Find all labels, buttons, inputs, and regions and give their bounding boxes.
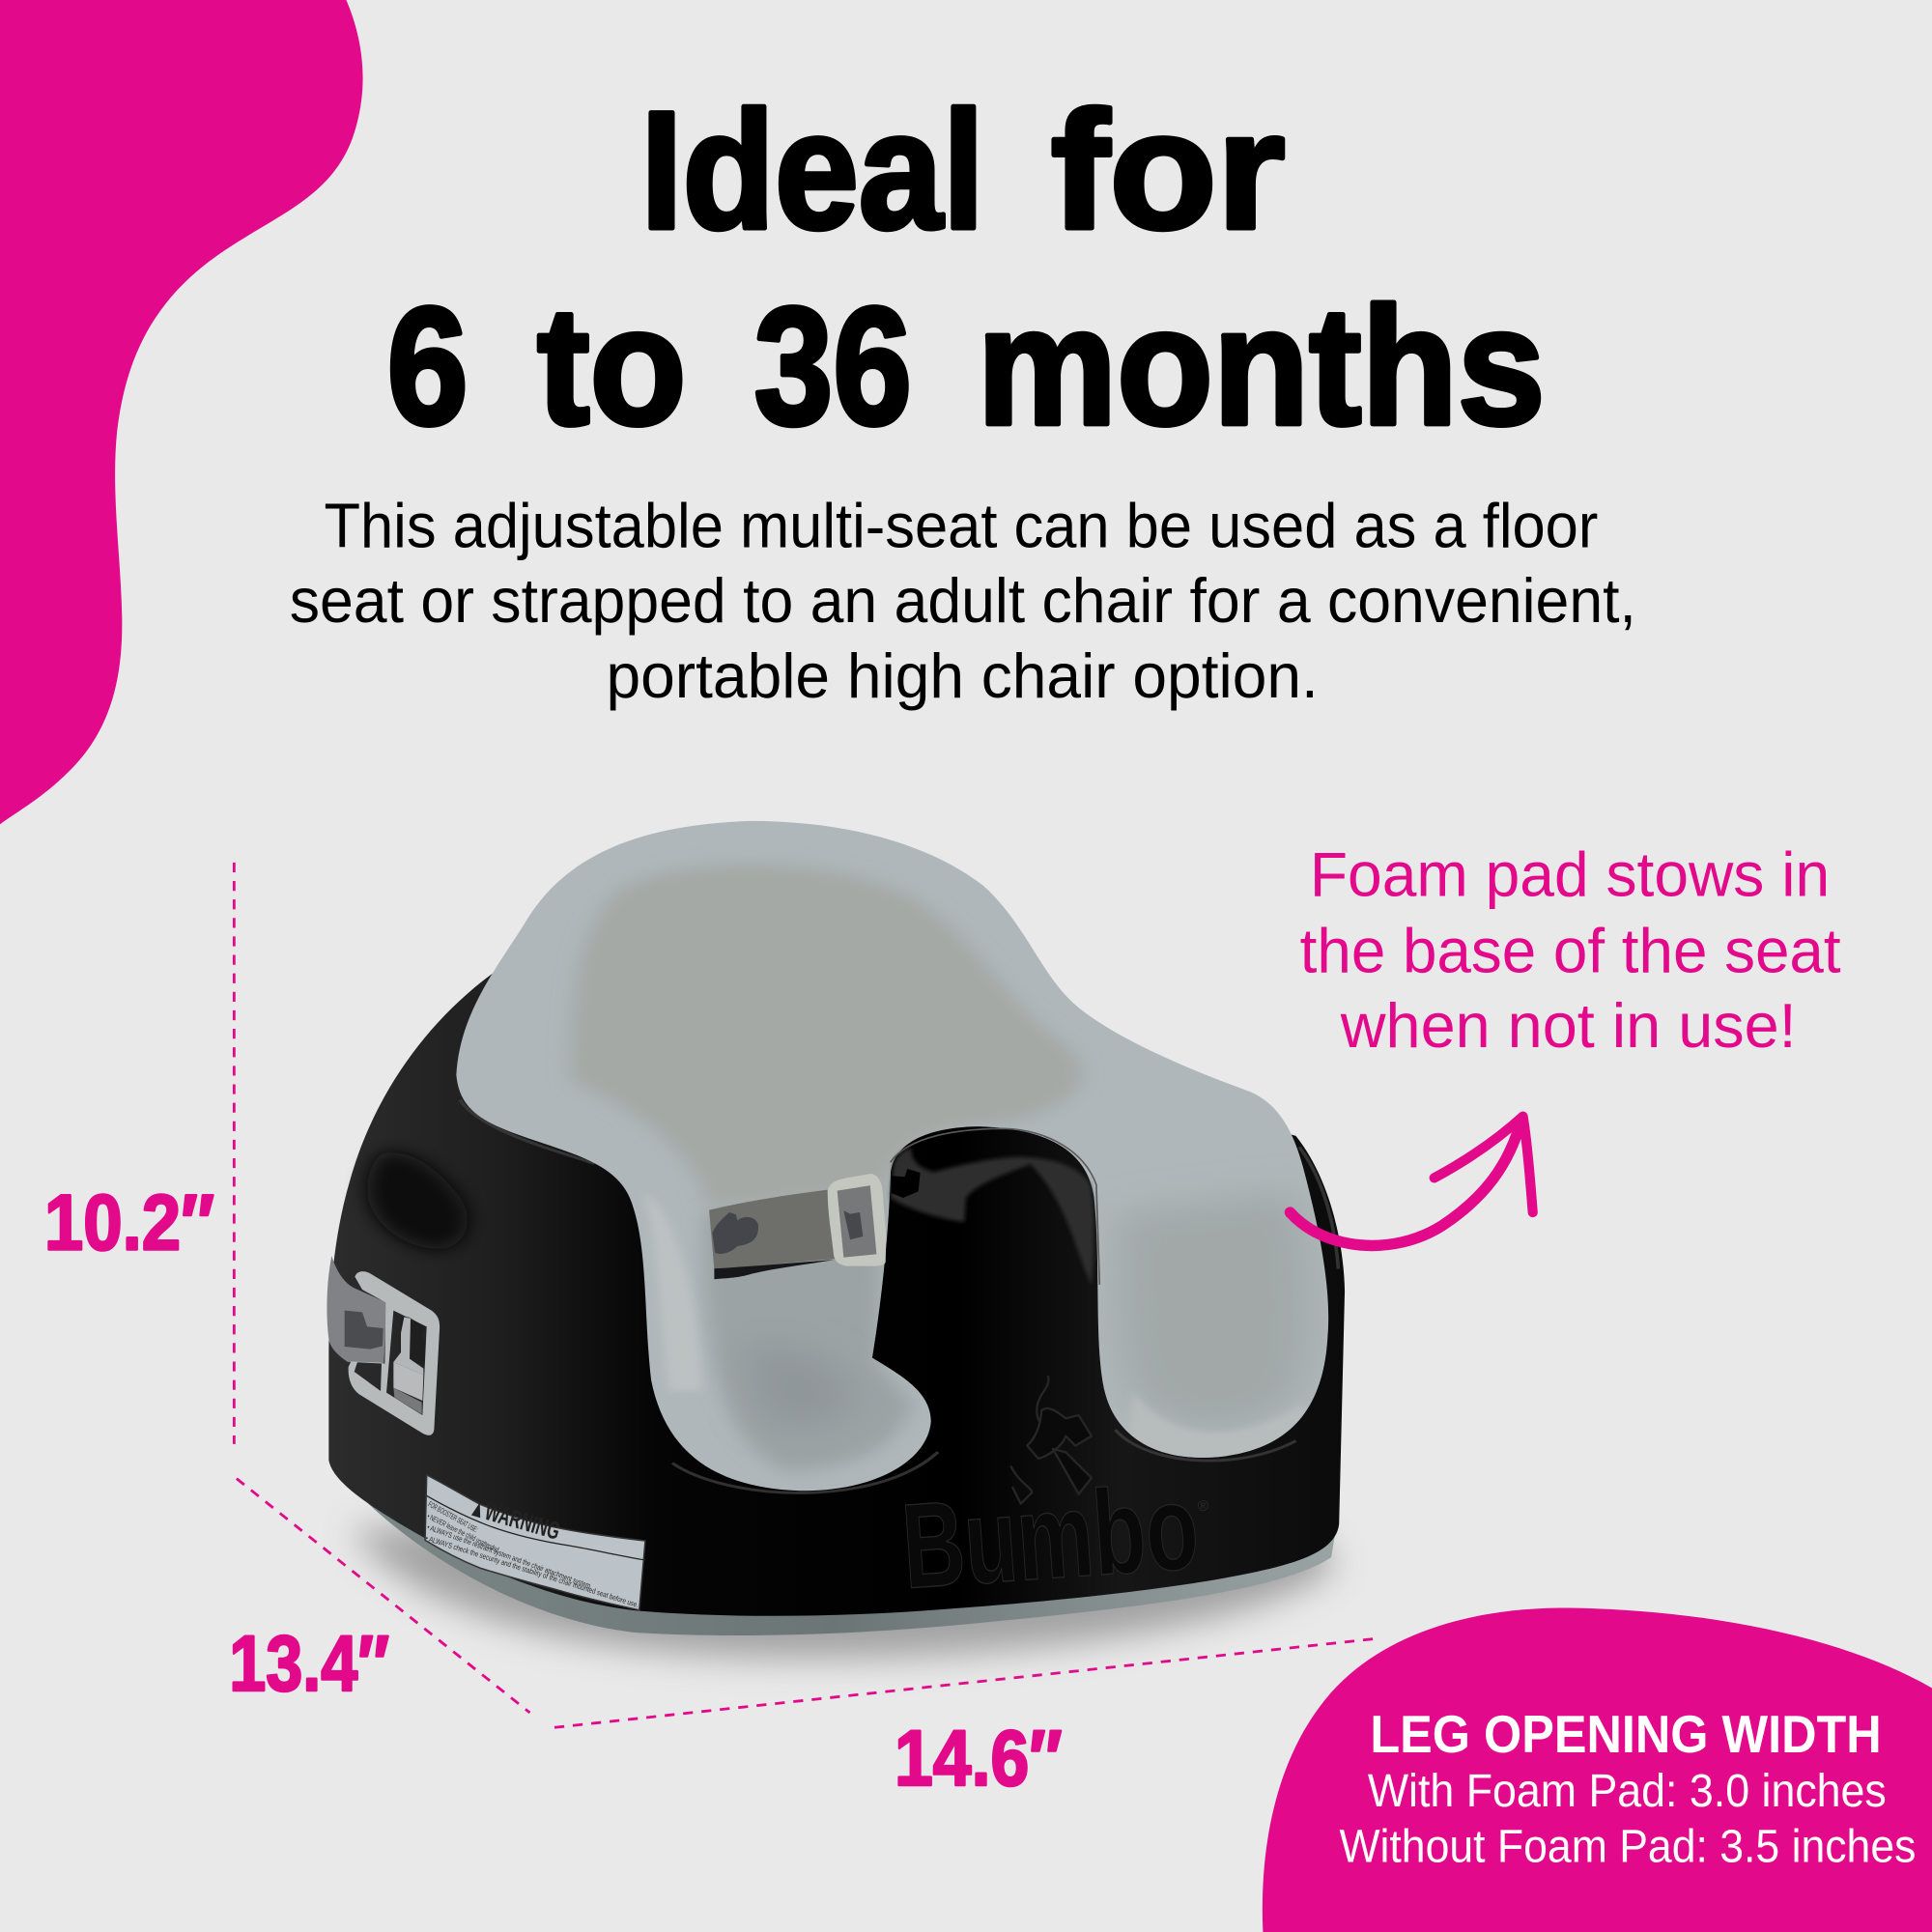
seat shadow (352, 1528, 1337, 1659)
dimension lines (234, 863, 1375, 1727)
side strap and buckle (327, 1256, 440, 1435)
buckle clip (399, 1317, 426, 1365)
seat black base (328, 964, 1345, 1616)
title: to (537, 272, 686, 460)
callout text: Foam pad stows in (1310, 838, 1830, 909)
title: months (977, 272, 1545, 460)
blob: top-left pink shape (0, 0, 363, 824)
lap strap (709, 1174, 886, 1279)
description text: portable high chair option. (607, 640, 1319, 711)
registered mark: ® (1198, 1498, 1209, 1515)
title: 6 (387, 272, 469, 460)
leg opening width text: With Foam Pad: 3.0 inches (1368, 1765, 1887, 1817)
leg opening width text: LEG OPENING WIDTH (1370, 1704, 1882, 1764)
strap logo (712, 1212, 758, 1254)
buckle frame (349, 1271, 440, 1435)
arrow (1290, 1117, 1533, 1245)
callout text: the base of the seat (1300, 915, 1841, 985)
strap logo (345, 1311, 384, 1350)
base gloss under pad (460, 1100, 1338, 1492)
seat base rim (332, 1430, 1338, 1635)
dimension label: width: 14.6″ (895, 1715, 1062, 1803)
embossed mascot (1011, 1377, 1092, 1504)
warning label divider (427, 1495, 645, 1560)
description text: This adjustable multi-seat can be used as a floor (324, 490, 1598, 560)
dimension label: depth: 13.4″ (229, 1620, 389, 1708)
blob: bottom-right pink shape (1263, 1608, 1932, 1932)
seat side recess (368, 1152, 468, 1250)
title (387, 76, 1545, 460)
warning label notes: FOR BOOSTER SEAT USE: (427, 1500, 479, 1534)
leg opening width text (1339, 1704, 1916, 1872)
post details (891, 1128, 1099, 1285)
foam pad (456, 821, 1328, 1491)
title: 36 (754, 272, 912, 460)
title: for (1051, 76, 1285, 264)
warning heading: ▲WARNING (467, 1493, 563, 1546)
title: Ideal (640, 76, 984, 264)
warning label notes: • NEVER leave the child unattended. (426, 1512, 501, 1555)
warning label notes: • ALWAYS check the security and the stability of the chair mounted seat before use. (424, 1534, 639, 1609)
description text: seat or strapped to an adult chair for a convenient, (290, 565, 1636, 636)
strap buckle (828, 1174, 886, 1266)
warning label notes: • ALWAYS use the restraint system and the chair attachment system. (426, 1522, 593, 1591)
description text (290, 490, 1636, 711)
embossed Bumbo logo: Bumbo (898, 1460, 1203, 1614)
callout text: when not in use! (1340, 990, 1797, 1061)
dimension label: height: 10.2″ (44, 1179, 214, 1266)
product photo: booster seat (327, 821, 1345, 1635)
warning label panel (425, 1475, 645, 1610)
foam pad interior shading (570, 864, 1324, 1471)
callout text (1300, 838, 1841, 1061)
